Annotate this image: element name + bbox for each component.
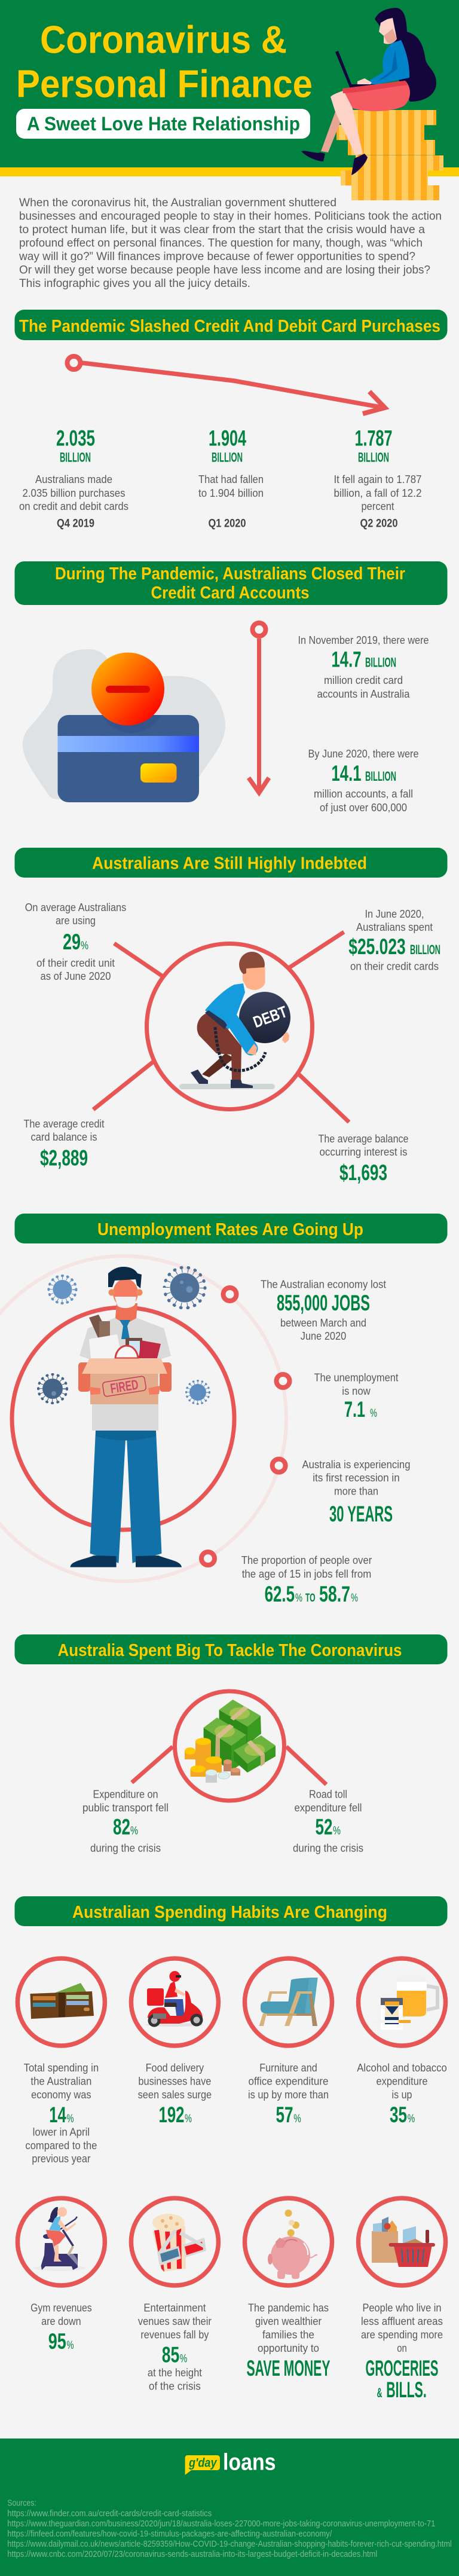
illustration: cash stacks and coins — [185, 1700, 276, 1783]
stat: public transport: 82 — [113, 1814, 130, 1839]
stat: groceries and bills: are spending more — [361, 2329, 443, 2341]
stat: entertainment: 85 — [162, 2343, 179, 2367]
stat: road toll: % — [333, 1825, 341, 1837]
stat: alcohol and tobacco: % — [408, 2113, 415, 2125]
stat: November 2019 accounts: accounts in Australia — [317, 688, 410, 700]
stat: road toll: expenditure fell — [294, 1802, 362, 1814]
stat: first recession: more than — [334, 1486, 378, 1498]
stat: unemployment rate: is now — [342, 1385, 371, 1397]
logo: loans — [223, 2450, 276, 2476]
stat: Q1 2020: BILLION — [212, 450, 243, 465]
stat: groceries and bills: & — [377, 2385, 382, 2400]
footer — [0, 2439, 459, 2576]
stat: first recession: 30 YEARS — [329, 1502, 393, 1526]
stat: alcohol and tobacco — [357, 2062, 447, 2127]
stat: entertainment: % — [180, 2353, 187, 2366]
stat: total spending: % — [67, 2113, 74, 2125]
stamp: fired: FIRED — [109, 1376, 139, 1397]
stat: save money: SAVE MONEY — [246, 2356, 331, 2381]
intro text: This infographic gives you all the juicy details. — [19, 277, 250, 290]
panel: closed accounts — [14, 561, 447, 814]
arrow: accounts falling — [249, 623, 269, 793]
stat: Q1 2020: That had fallen — [198, 473, 264, 485]
stat: June 2020 accounts: of just over 600,000 — [320, 802, 407, 814]
stat: average balance: $2,889 — [40, 1145, 88, 1171]
stat: Q4 2019: BILLION — [60, 450, 91, 465]
stat: June 2020 accounts: By June 2020, there were — [308, 748, 418, 760]
logo — [185, 2450, 276, 2476]
stat: road toll: during the crisis — [293, 1842, 363, 1854]
icon: piggy bank with coins — [268, 2210, 317, 2279]
stat: balance accruing interest: The average balance — [318, 1133, 409, 1145]
intro text — [19, 196, 442, 290]
stat: public transport: Expenditure on — [93, 1789, 158, 1801]
intro text: to protect human life, but it was clear from the start that the crisis would have a — [19, 223, 425, 236]
stat: save money: The pandemic has — [248, 2302, 329, 2314]
icon: virus 1 — [48, 1276, 76, 1303]
stat: Q1 2020: Q1 2020 — [208, 517, 246, 530]
heading: spending habits: Australian Spending Habits Are Changing — [72, 1903, 387, 1922]
stat: credit utilisation: % — [81, 940, 88, 952]
stat: balance accruing interest: occurring interest is — [319, 1146, 408, 1158]
stat: Q2 2020 — [333, 426, 422, 530]
stat: credit utilisation — [25, 902, 126, 982]
stat: people in jobs: The proportion of people over — [241, 1554, 372, 1566]
stat: credit utilisation: On average Australians — [25, 902, 126, 913]
heading: unemployment — [14, 1214, 447, 1243]
stat: average balance: card balance is — [31, 1131, 97, 1143]
title: Personal Finance — [16, 62, 313, 105]
stat: entertainment: venues saw their — [138, 2315, 212, 2327]
stat: save money — [246, 2302, 331, 2381]
icon: beer and cigarettes — [374, 1976, 437, 2030]
stat: gym revenues: Gym revenues — [30, 2302, 92, 2314]
panel: indebted — [14, 848, 447, 1185]
stat: food delivery: businesses have — [138, 2076, 211, 2088]
stat: Q1 2020: to 1.904 billion — [198, 487, 264, 499]
panel: government spending — [14, 1634, 447, 1854]
stat: Q4 2019 — [19, 426, 128, 530]
stat: total spending: compared to the — [25, 2140, 97, 2152]
intro text: way will it go?” Will finances improve because of fewer opportunities to spend? — [19, 250, 415, 263]
stat: total spending: previous year — [32, 2153, 90, 2165]
stat: save money: opportunity to — [258, 2342, 319, 2354]
stat: June 2020 accounts: 14.1 — [331, 761, 361, 786]
heading: card purchases — [14, 310, 447, 340]
illustration: man carrying debt ball — [179, 952, 290, 1089]
heading: indebted — [14, 848, 447, 878]
stat: people in jobs: TO — [305, 1592, 316, 1605]
illustration: fired worker holding a box — [71, 1267, 182, 1567]
heading: government spending — [14, 1634, 447, 1664]
stat: credit utilisation: as of June 2020 — [41, 970, 111, 982]
heading: closed accounts — [14, 561, 447, 605]
intro text: profound effect on personal finances. The question for many, though, was “which — [19, 237, 423, 250]
stat: entertainment — [138, 2302, 212, 2392]
stat: people in jobs: the age of 15 in jobs fell from — [242, 1568, 371, 1580]
stat: food delivery: seen sales surge — [138, 2089, 212, 2101]
stat: November 2019 accounts: BILLION — [365, 655, 396, 670]
stat: credit utilisation: are using — [56, 915, 96, 927]
stat: alcohol and tobacco: Alcohol and tobacco — [357, 2062, 447, 2074]
illustration: man carrying debt ball: DEBT — [251, 1003, 290, 1031]
stat: November 2019 accounts: million credit card — [324, 674, 403, 686]
stat: November 2019 accounts: 14.7 — [331, 647, 361, 672]
stat: credit utilisation: of their credit unit — [36, 957, 115, 969]
stat: public transport: during the crisis — [90, 1842, 161, 1854]
subtitle pill: A Sweet Love Hate Relationship — [27, 113, 300, 135]
stat: Q2 2020: Q2 2020 — [360, 517, 398, 530]
stat: June 2020 accounts — [308, 748, 418, 814]
subtitle pill — [16, 109, 310, 139]
stat: food delivery — [138, 2062, 212, 2127]
stat: save money: families the — [262, 2329, 314, 2341]
stat: total spending: 14 — [49, 2103, 66, 2127]
stat: furniture: 57 — [276, 2103, 293, 2127]
stat: Q2 2020: BILLION — [358, 450, 389, 465]
stat: furniture — [248, 2062, 329, 2127]
stat: average balance: The average credit — [24, 1118, 104, 1130]
icon: armchair — [259, 1978, 318, 2026]
stat: groceries and bills: BILLS. — [386, 2378, 427, 2402]
stat: jobs lost: June 2020 — [301, 1330, 346, 1342]
sources: https://www.cnbc.com/2020/07/23/coronavirus-sends-australia-into-its-largest-budget-deficit-in-decades.html — [7, 2549, 377, 2559]
stat: total spent on cards: $25.023 — [348, 934, 406, 959]
stat: unemployment rate — [314, 1372, 398, 1422]
stat: save money: given wealthier — [255, 2315, 322, 2327]
stat: entertainment: Entertainment — [143, 2302, 206, 2314]
stat: jobs lost — [261, 1278, 386, 1342]
stat: total spent on cards: on their credit cards — [350, 961, 439, 973]
stat: jobs lost: between March and — [280, 1317, 366, 1329]
intro text: businesses and encouraged people to stay in their homes. Politicians took the action — [19, 210, 442, 223]
diagram ring with connectors — [93, 932, 349, 1122]
stat: June 2020 accounts: million accounts, a fall — [314, 788, 413, 800]
stat: Q4 2019: Q4 2019 — [57, 517, 94, 530]
arrow: falling trend — [67, 356, 385, 414]
title: Coronavirus & — [40, 18, 287, 61]
icon: groceries and basket — [372, 2217, 435, 2267]
stat: balance accruing interest: $1,693 — [339, 1160, 387, 1185]
stat: groceries and bills: on — [397, 2342, 407, 2354]
diagram ring with connectors — [131, 1691, 326, 1801]
sources: Sources: — [7, 2498, 36, 2508]
stat: gym revenues: are down — [41, 2315, 81, 2327]
stat: total spending: Total spending in — [24, 2062, 99, 2074]
intro text: When the coronavirus hit, the Australian government shuttered — [19, 196, 336, 209]
stat: furniture: office expenditure — [249, 2076, 329, 2088]
stat: gym revenues: % — [67, 2339, 74, 2352]
stat: Q4 2019: 2.035 — [56, 426, 95, 451]
icon: popcorn and 3D glasses — [152, 2214, 206, 2272]
stat: Q4 2019: Australians made — [35, 473, 112, 485]
icon: virus 3 — [38, 1374, 67, 1403]
sources: https://www.finder.com.au/credit-cards/credit-card-statistics — [7, 2508, 212, 2519]
stat: food delivery: % — [185, 2113, 192, 2125]
stat: groceries and bills: People who live in — [362, 2302, 441, 2314]
icon: wallet — [30, 1983, 94, 2019]
stat: people in jobs — [241, 1554, 372, 1606]
stat: Q2 2020: billion, a fall of 12.2 — [333, 487, 422, 499]
stat: public transport: % — [130, 1825, 138, 1837]
stat: Q2 2020: 1.787 — [355, 426, 392, 451]
heading: closed accounts: Credit Card Accounts — [151, 583, 310, 603]
stat: road toll — [293, 1789, 363, 1854]
stat: food delivery: Food delivery — [146, 2062, 204, 2074]
stat: groceries and bills — [361, 2302, 443, 2402]
stat: public transport — [82, 1789, 169, 1854]
panel: unemployment — [0, 1214, 447, 1606]
stat: gym revenues — [30, 2302, 92, 2354]
panel: card purchases — [14, 310, 447, 530]
icon: credit card with minus badge — [23, 649, 225, 802]
heading: unemployment: Unemployment Rates Are Going Up — [97, 1220, 363, 1239]
stat: people in jobs: 62.5 — [265, 1582, 295, 1606]
header banner — [0, 0, 459, 200]
marker rings — [201, 1288, 289, 1565]
stat: entertainment: revenues fall by — [140, 2329, 209, 2341]
stat: first recession: its first recession in — [313, 1472, 400, 1484]
panel: spending habits — [14, 1896, 447, 2402]
stat: furniture: is up by more than — [248, 2089, 329, 2101]
stat: public transport: public transport fell — [82, 1802, 169, 1814]
stat: average balance — [24, 1118, 104, 1171]
heading: government spending: Australia Spent Big To Tackle The Coronavirus — [57, 1641, 402, 1660]
stat: alcohol and tobacco: is up — [392, 2089, 412, 2101]
stat: total spending: economy was — [31, 2089, 91, 2101]
stat: jobs lost: 855,000 JOBS — [277, 1291, 370, 1315]
stat: first recession — [302, 1459, 410, 1526]
stat: June 2020 accounts: BILLION — [365, 769, 396, 784]
illustration: woman with laptop on coin stack — [301, 8, 443, 200]
stat: gym revenues: 95 — [48, 2329, 66, 2354]
stat: unemployment rate: The unemployment — [314, 1372, 398, 1384]
icon: exercise bike — [33, 2207, 86, 2271]
title — [16, 18, 313, 105]
stat: Q4 2019: on credit and debit cards — [19, 500, 128, 512]
stat: first recession: Australia is experiencing — [302, 1459, 410, 1471]
stat: November 2019 accounts — [298, 634, 429, 700]
stat: furniture: Furniture and — [259, 2062, 317, 2074]
stat: jobs lost: The Australian economy lost — [261, 1278, 386, 1290]
stat: credit utilisation: 29 — [63, 930, 81, 954]
stat: total spending: the Australian — [30, 2076, 91, 2088]
stat: entertainment: at the height — [148, 2367, 202, 2379]
icon rings — [17, 1958, 445, 2285]
heading: indebted: Australians Are Still Highly Indebted — [92, 854, 367, 873]
stat: road toll: Road toll — [309, 1789, 347, 1801]
stat: unemployment rate: % — [370, 1407, 377, 1420]
stat: Q2 2020: It fell again to 1.787 — [333, 473, 422, 485]
stat: alcohol and tobacco: 35 — [390, 2103, 407, 2127]
stat: groceries and bills: less affluent areas — [361, 2315, 443, 2327]
icon: delivery scooter — [146, 1971, 203, 2027]
stat: alcohol and tobacco: expenditure — [377, 2076, 428, 2088]
stat: furniture: % — [293, 2113, 301, 2125]
stat: November 2019 accounts: In November 2019, there were — [298, 634, 429, 646]
stat: unemployment rate: 7.1 — [344, 1397, 365, 1422]
stat: people in jobs: % — [351, 1592, 358, 1605]
heading: spending habits — [14, 1896, 447, 1926]
stat: Q2 2020: percent — [361, 500, 394, 512]
stat: balance accruing interest — [318, 1133, 409, 1185]
diagram rings — [0, 1256, 286, 1581]
logo: g'day — [188, 2456, 218, 2470]
icon: virus 4 — [186, 1381, 209, 1404]
stat: total spending: lower in April — [33, 2126, 90, 2138]
stat: total spent on cards: Australians spent — [356, 921, 433, 933]
stat: entertainment: of the crisis — [149, 2381, 201, 2392]
stat: total spending — [24, 2062, 99, 2165]
intro text: Or will they get worse because people have less income and are losing their jobs? — [19, 264, 430, 277]
sources: https://finfeed.com/features/how-covid-19-stimulus-packages-are-affecting-australian-economy/ — [7, 2529, 332, 2539]
stamp: fired — [102, 1376, 146, 1397]
stat: total spent on cards: In June 2020, — [365, 908, 424, 920]
stat: total spent on cards — [348, 908, 440, 973]
stat: people in jobs: 58.7 — [319, 1582, 350, 1606]
stat: Q4 2019: 2.035 billion purchases — [23, 487, 126, 499]
heading: closed accounts: During The Pandemic, Australians Closed Their — [55, 564, 405, 583]
stat: people in jobs: % — [295, 1592, 302, 1605]
stat: Q1 2020: 1.904 — [209, 426, 246, 451]
stat: Q1 2020 — [198, 426, 264, 530]
stat: road toll: 52 — [316, 1814, 332, 1839]
icon: virus 2 — [164, 1267, 205, 1308]
sources — [7, 2498, 452, 2559]
stat: food delivery: 192 — [159, 2103, 184, 2127]
